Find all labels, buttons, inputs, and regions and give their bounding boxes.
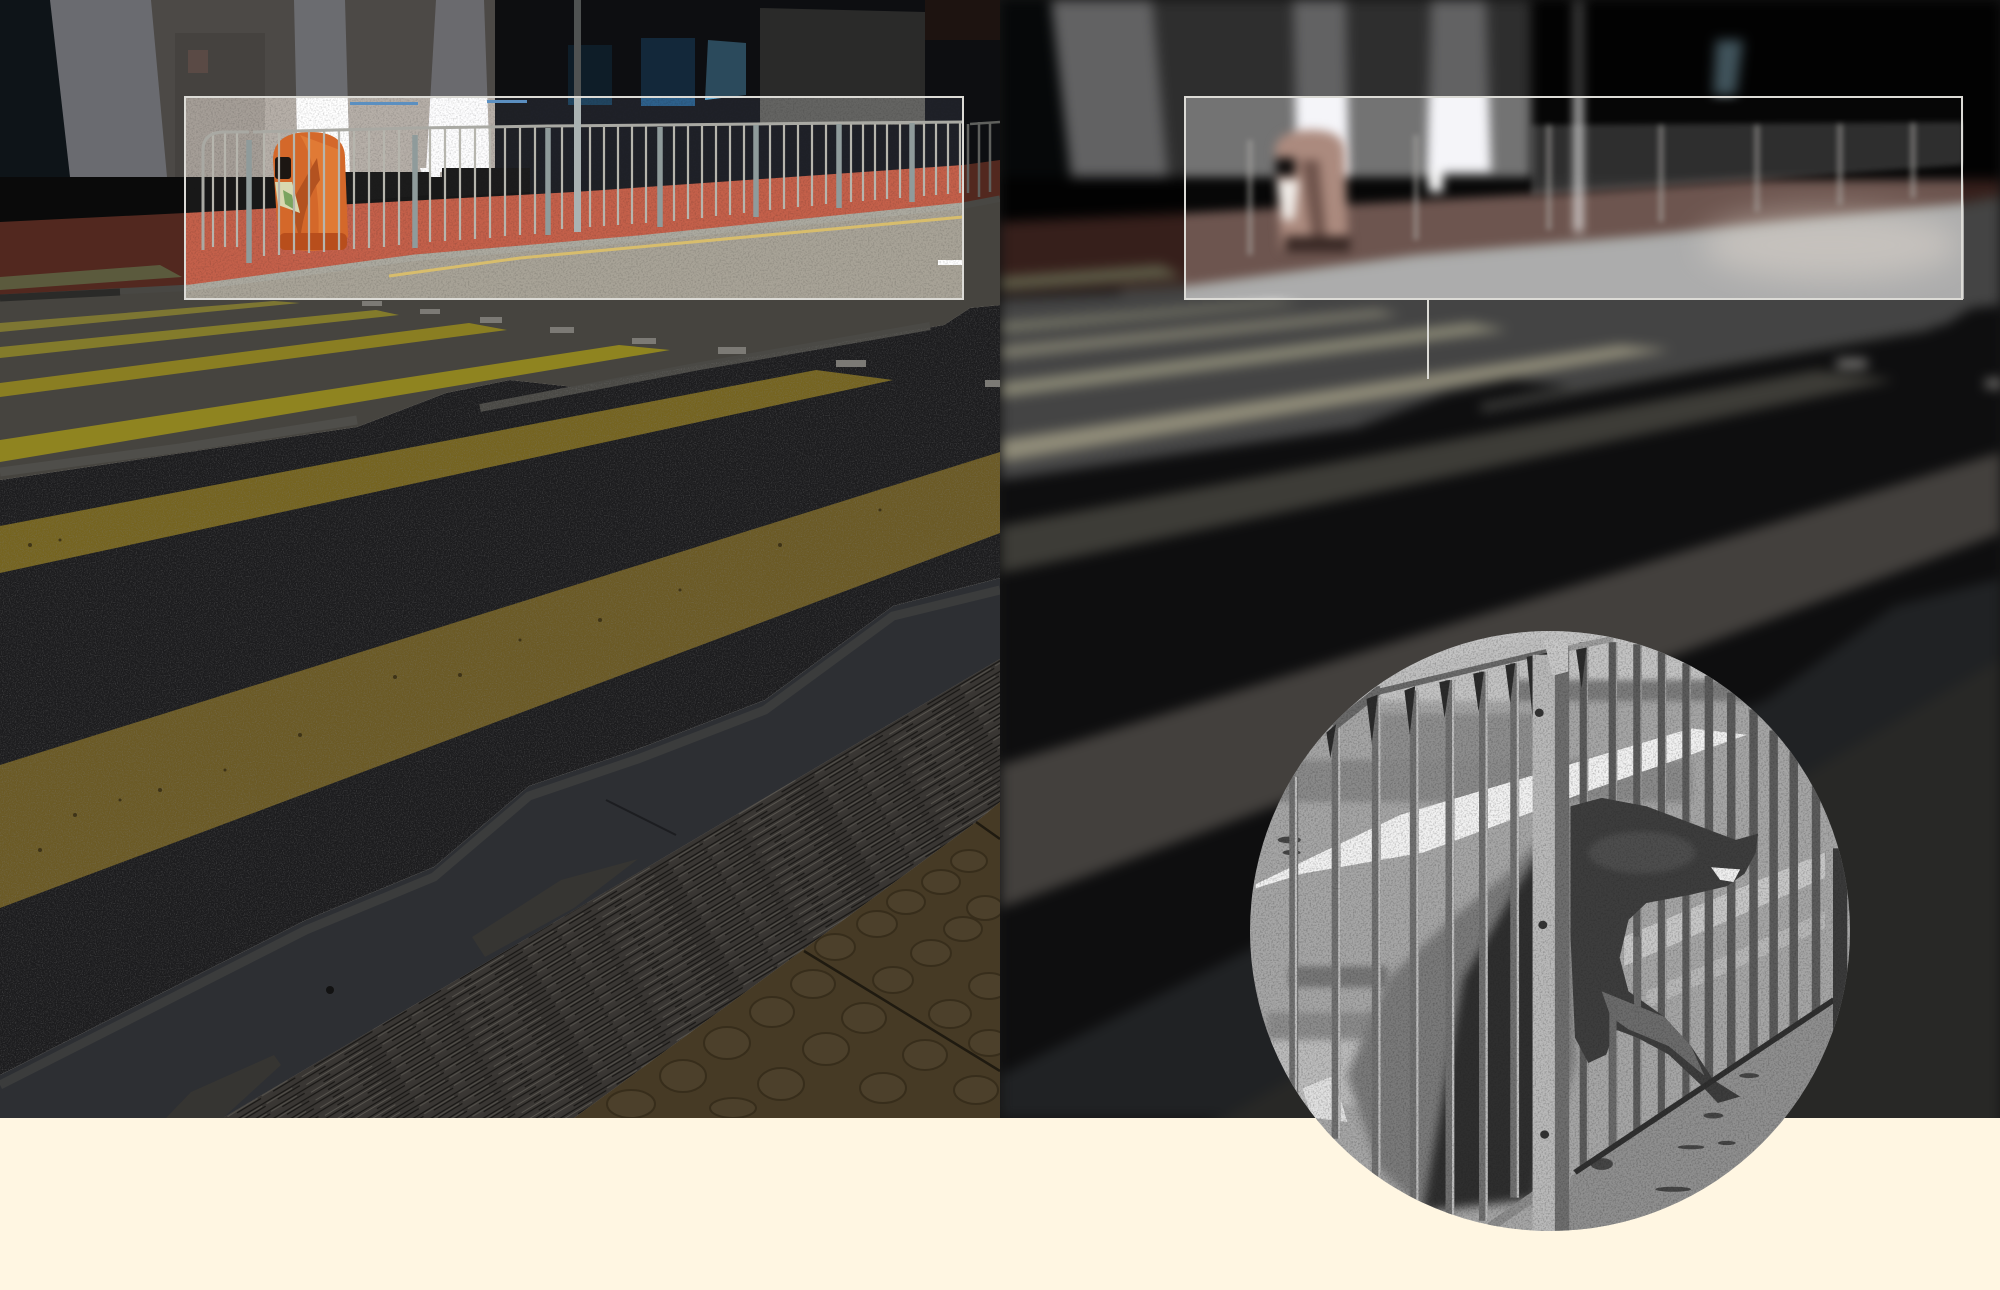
panel: sharp street photo [0,0,1009,1120]
yellow kerb line [389,217,963,276]
road background bands [1266,631,1744,1106]
left top rail [1334,650,1548,726]
photo grain [1250,631,1851,1232]
lower left rail [1488,1192,1533,1226]
road glow [1701,210,1961,280]
far road marking [1624,853,1825,966]
boar head and foreleg [1571,798,1758,1103]
bar shadow spikes [1326,646,1587,758]
blurred posts [1250,123,1913,255]
connector line to circle [1427,299,1429,379]
boar body [1347,802,1575,1215]
blurred fence haze [1531,122,1964,195]
white road marking [1256,728,1747,888]
dim fence beyond highlighted box [968,122,1000,197]
road grain [185,205,963,299]
speckled wear on yellow crossing stripe [28,508,882,852]
lamp pole [574,97,581,232]
barrier top rail [203,122,963,250]
blurred bin [1275,130,1350,252]
barrier bars [213,122,960,256]
ground debris [1566,1000,1852,1240]
boar tusk [1711,867,1740,882]
worn kerb edge [0,590,1000,1085]
tactile paving [607,822,1009,1118]
circular photo: boar at barrier [1245,625,1870,1240]
far barrier post [1833,848,1847,1042]
asphalt grain [0,300,1000,1100]
panel: highlighted barrier strip [186,98,962,298]
bar in front of leg [1613,937,1637,1147]
panel: blurred street photo [1000,0,2000,1130]
highlight frame, blurred panel [1185,97,1962,299]
concrete patches [166,800,676,1118]
lower right rail [1575,1000,1834,1172]
right barrier bars [1584,642,1816,1167]
highlighted blurred strip [1186,98,1964,299]
central post [1533,639,1613,1236]
textured paving strip [200,640,1000,1120]
blue signage strips [350,100,527,105]
left barrier bars [1294,663,1515,1221]
litter bin [273,132,348,251]
highlight frame, sharp panel [185,97,963,299]
barrier posts [249,123,912,263]
